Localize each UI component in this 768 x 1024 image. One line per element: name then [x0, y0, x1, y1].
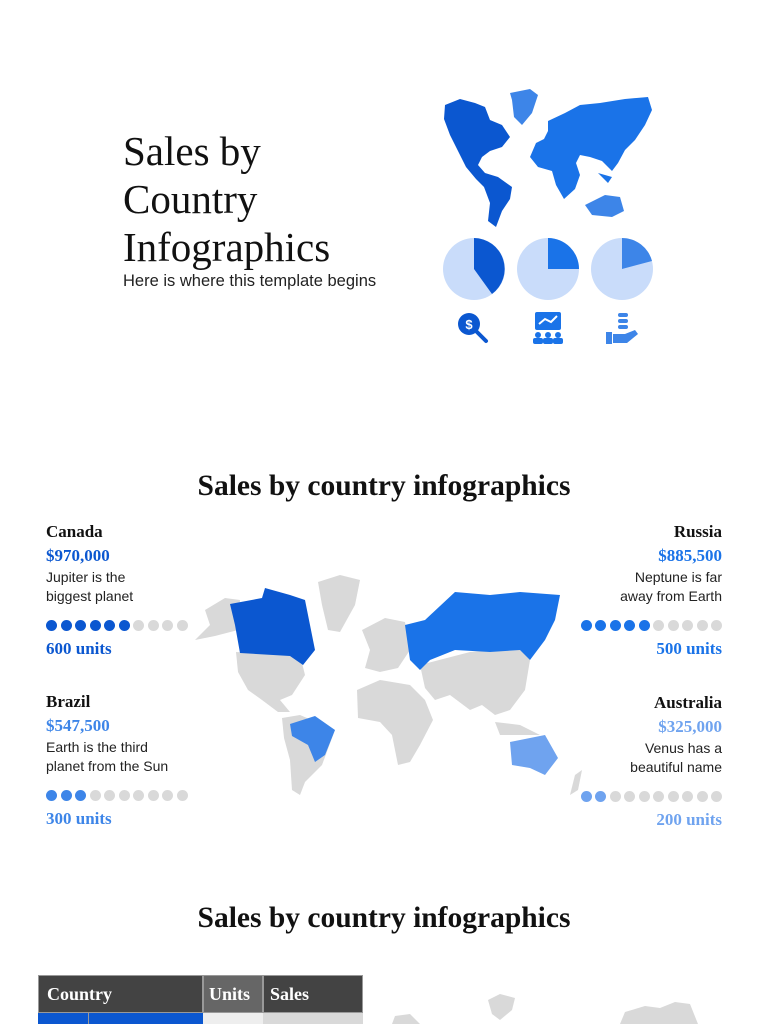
title: Country — [123, 176, 257, 222]
panel: russia: 500 units — [656, 639, 722, 658]
panel: brazil: 300 units — [46, 809, 112, 828]
icon: coins hand — [606, 313, 638, 344]
panel: canada: Canada — [46, 522, 103, 541]
panel: australia: Venus has a — [645, 740, 722, 756]
panel: brazil: planet from the Sun — [46, 758, 168, 774]
panel: russia: Russia — [674, 522, 722, 541]
panel: brazil: $547,500 — [46, 716, 110, 735]
australia — [510, 735, 558, 775]
greenland — [510, 89, 538, 125]
title: Infographics — [123, 224, 330, 270]
canada — [230, 588, 315, 665]
russia — [405, 592, 560, 670]
table: Country — [47, 984, 112, 1004]
panel: australia — [581, 693, 722, 829]
world map choropleth — [195, 575, 582, 795]
table — [38, 975, 363, 1024]
section heading 1: Sales by country infographics — [198, 470, 570, 502]
panel: russia: $885,500 — [658, 546, 722, 565]
panel: australia: beautiful name — [630, 759, 722, 775]
section heading 2: Sales by country infographics — [198, 902, 570, 934]
panel: australia: $325,000 — [658, 717, 722, 736]
icon: money search: $ — [465, 317, 473, 332]
title — [123, 128, 330, 270]
north & south america — [444, 99, 512, 227]
icons row — [458, 312, 638, 344]
eurasia africa australia — [530, 97, 652, 217]
panel: russia: away from Earth — [620, 588, 722, 604]
subtitle: Here is where this template begins — [123, 272, 376, 290]
pie 1 — [443, 238, 505, 300]
panel: australia: 200 units — [656, 810, 722, 829]
pie 3 — [591, 238, 653, 300]
panel: brazil — [46, 692, 188, 828]
panel: canada: Jupiter is the — [46, 569, 125, 585]
panel: australia: Australia — [654, 693, 722, 712]
pie charts — [443, 238, 653, 300]
panel: brazil: Brazil — [46, 692, 90, 711]
title: Sales by — [123, 128, 261, 174]
panel: brazil: Earth is the third — [46, 739, 148, 755]
panel: russia: Neptune is far — [635, 569, 722, 585]
hero world map — [444, 89, 652, 227]
table: Sales — [270, 984, 309, 1004]
partial gray map — [392, 994, 698, 1024]
panel: canada: 600 units — [46, 639, 112, 658]
pie 2 — [517, 238, 579, 300]
panel: canada: biggest planet — [46, 588, 133, 604]
panel: russia — [581, 522, 722, 658]
icon: presentation — [533, 312, 563, 344]
table: Units — [209, 984, 250, 1004]
panel: canada — [46, 522, 188, 658]
brazil — [290, 716, 335, 762]
panel: canada: $970,000 — [46, 546, 110, 565]
icon: money search — [458, 313, 486, 341]
